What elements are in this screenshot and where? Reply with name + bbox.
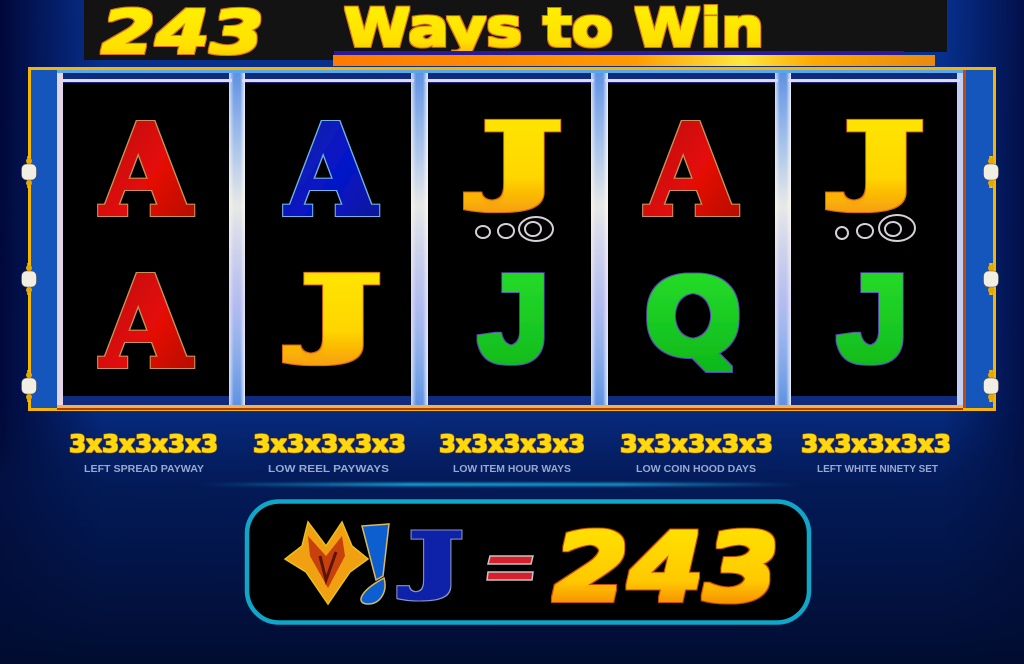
caption 2: 3x3x3x3x3 bbox=[253, 430, 406, 458]
frame knobs bbox=[22, 156, 998, 402]
caption 4: 3x3x3x3x3 bbox=[620, 430, 773, 458]
caption 5 bbox=[801, 430, 951, 475]
reel 1 bbox=[60, 79, 232, 396]
icon: blue exclamation bbox=[361, 524, 389, 604]
caption 3: 3x3x3x3x3 bbox=[439, 430, 585, 458]
symbol: green Q: Q bbox=[644, 257, 742, 379]
ornament bbox=[836, 215, 915, 241]
symbol: green J: J bbox=[837, 250, 909, 388]
caption 2: LOW REEL PAYWAYS bbox=[268, 463, 389, 475]
reel 3 bbox=[425, 79, 594, 396]
caption 1: 3x3x3x3x3 bbox=[69, 430, 218, 458]
glow divider bbox=[200, 483, 800, 486]
symbol: yellow J: J bbox=[285, 257, 383, 365]
caption 4: LOW COIN HOOD DAYS bbox=[636, 463, 756, 475]
symbol: yellow J: J bbox=[828, 104, 926, 212]
title underline bar bbox=[333, 51, 935, 66]
caption 2 bbox=[253, 430, 406, 475]
symbol: red A: A bbox=[645, 98, 738, 244]
icon: heart symbol bbox=[285, 522, 368, 604]
caption 5: 3x3x3x3x3 bbox=[801, 430, 951, 458]
title banner bbox=[84, 0, 947, 68]
reel captions bbox=[69, 430, 951, 475]
caption 4 bbox=[620, 430, 773, 475]
caption 5: LEFT WHITE NINETY SET bbox=[817, 463, 939, 475]
symbol: green J: J bbox=[478, 250, 550, 388]
symbol: blue A: A bbox=[285, 98, 378, 244]
caption 1 bbox=[69, 430, 218, 475]
title: 243: 243 bbox=[101, 0, 264, 68]
caption 3: LOW ITEM HOUR WAYS bbox=[453, 463, 571, 475]
ornament bbox=[476, 217, 553, 241]
symbol: yellow J: J bbox=[466, 104, 564, 212]
caption 1: LEFT SPREAD PAYWAY bbox=[84, 463, 204, 475]
reel frame bbox=[30, 68, 994, 410]
formula panel bbox=[247, 502, 809, 623]
reel 4 bbox=[605, 79, 778, 396]
symbol: red A lower: A bbox=[100, 250, 193, 396]
symbol: red A: A bbox=[100, 98, 193, 244]
result: 243: 243 bbox=[553, 514, 779, 623]
reel 5 bbox=[788, 79, 960, 396]
equals sign bbox=[487, 556, 533, 580]
reel 2 bbox=[242, 79, 414, 396]
caption 3 bbox=[439, 430, 585, 475]
symbol: blue J: J bbox=[398, 518, 464, 601]
